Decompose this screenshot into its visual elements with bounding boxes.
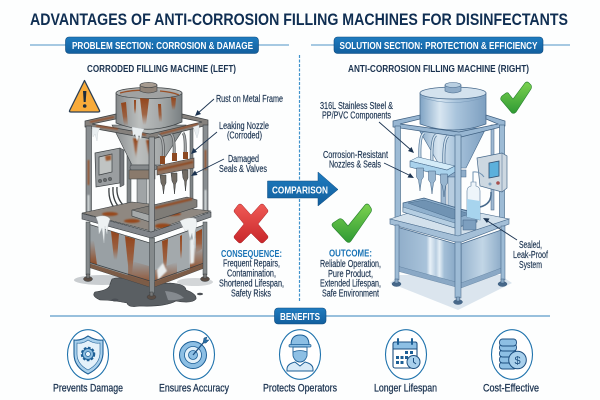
pipes, manifold and nozzles — [410, 133, 455, 197]
heading: corroded machine: CORRODED FILLING MACHINE (LEFT) — [87, 64, 236, 75]
cabinet posts and feet — [84, 222, 210, 300]
tray rail — [132, 197, 197, 222]
callout: damaged seals: Seals & Valves — [219, 164, 267, 175]
benefit: prevents damage — [53, 330, 123, 394]
floor shadow — [390, 275, 512, 310]
callout: stainless steel components: 316L Stainless Steel & — [320, 101, 393, 112]
arrow: comparison: COMPARISON — [272, 186, 328, 196]
icicles on frame — [92, 125, 199, 141]
pipes, manifold and corroded nozzles — [157, 133, 194, 194]
benefit: protects operators — [263, 330, 337, 394]
callout: damaged seals — [191, 154, 267, 176]
bottle — [467, 172, 484, 220]
heading: benefits badge — [274, 308, 326, 324]
divider: dashed centre line — [298, 55, 300, 301]
front support post — [149, 137, 154, 237]
worktable top — [82, 202, 211, 231]
heading: problem section badge: PROBLEM SECTION: CORROSION & DAMAGE — [72, 40, 253, 52]
control box — [477, 153, 507, 207]
back frame posts — [441, 125, 494, 210]
text block: consequence: CONSEQUENCE: — [221, 249, 282, 260]
text block: consequence — [219, 249, 284, 300]
corroded filling machine illustration — [74, 82, 213, 307]
left and right support posts — [395, 125, 504, 222]
top frame — [393, 115, 505, 137]
tank — [420, 82, 486, 130]
callout: damaged seals: Damaged — [228, 154, 259, 165]
text block: outcome: Extended Lifespan, — [320, 278, 381, 290]
tray rail — [403, 198, 477, 230]
callout: leaking nozzle — [191, 121, 269, 154]
callout: sealed system — [483, 218, 548, 271]
text block: outcome: OUTCOME: — [329, 248, 372, 260]
puddle and shadow — [74, 275, 213, 307]
callout: rust on metal frame — [195, 94, 283, 116]
worktable edge — [82, 212, 211, 238]
callout: stainless steel components: PP/PVC Components — [322, 110, 391, 122]
heading: benefits badge: BENEFITS — [280, 312, 320, 323]
callout: leaking nozzle: (Corroded) — [227, 130, 262, 142]
icon: green check outcome — [332, 204, 372, 242]
heading: solution section badge — [334, 37, 543, 54]
benefit: ensures accuracy: Ensures Accuracy — [159, 382, 229, 394]
cabinet with rust — [88, 224, 204, 287]
text block: outcome — [320, 248, 381, 300]
callout: leaking nozzle: Leaking Nozzle — [219, 121, 269, 132]
panel: solution section — [311, 37, 570, 310]
benefit: longer lifespan — [374, 330, 437, 394]
text block: consequence: Safety Risks — [231, 288, 271, 300]
benefit: protects operators: Protects Operators — [263, 382, 337, 394]
callout: rust on metal frame: Rust on Metal Frame — [216, 94, 283, 105]
front support post — [455, 135, 461, 237]
hopper — [418, 128, 486, 207]
cabinet posts and feet — [392, 225, 507, 304]
text block: outcome: Reliable Operation, — [320, 259, 381, 270]
back frame posts — [127, 125, 193, 210]
benefit: ensures accuracy — [159, 330, 229, 394]
callout: stainless steel components — [320, 101, 414, 153]
callout: sealed system: Leak-Proof — [513, 250, 548, 261]
panel: benefits — [50, 308, 550, 394]
benefit: cost-effective — [483, 330, 539, 394]
top frame — [85, 114, 208, 139]
heading: anti-corrosion machine: ANTI-CORROSION FILLING MACHINE (RIGHT) — [348, 64, 529, 75]
benefit: prevents damage: Prevents Damage — [53, 382, 123, 394]
control box — [95, 148, 124, 212]
left and right support posts — [86, 125, 208, 218]
benefit: cost-effective: $ — [514, 355, 521, 367]
worktable edge — [390, 219, 509, 243]
callout: nozzles and seals — [323, 150, 414, 178]
callout: nozzles and seals: Nozzles & Seals — [329, 160, 381, 170]
benefit: cost-effective: Cost-Effective — [483, 382, 539, 394]
heading: problem section badge — [66, 37, 258, 54]
callout: nozzles and seals: Corrosion-Resistant — [323, 150, 388, 161]
worktable top — [390, 204, 509, 236]
cabinet — [397, 227, 504, 288]
icon: warning triangle — [69, 80, 100, 112]
arrow: comparison — [268, 172, 338, 206]
callout: sealed system: Sealed, — [519, 240, 542, 251]
text block: consequence: Contamination, — [227, 268, 276, 280]
icon: red cross — [234, 204, 268, 243]
callout: sealed system: System — [519, 260, 542, 271]
text block: consequence: Shortened Lifespan, — [219, 278, 284, 290]
text block: outcome: Pure Product, — [328, 269, 373, 280]
heading: solution section badge: SOLUTION SECTION: PROTECTION & EFFICIENCY — [340, 40, 538, 52]
white residue drips — [96, 216, 197, 245]
panel: problem section — [30, 37, 289, 307]
benefit: longer lifespan: Longer Lifespan — [374, 382, 437, 394]
icon: large green check — [501, 82, 532, 113]
text block: consequence: Frequent Repairs, — [223, 258, 280, 270]
hopper — [112, 125, 186, 209]
tank with rust streaks — [116, 82, 182, 129]
text block: outcome: Safe Environment — [322, 288, 379, 300]
anti-corrosion filling machine illustration — [390, 82, 512, 310]
